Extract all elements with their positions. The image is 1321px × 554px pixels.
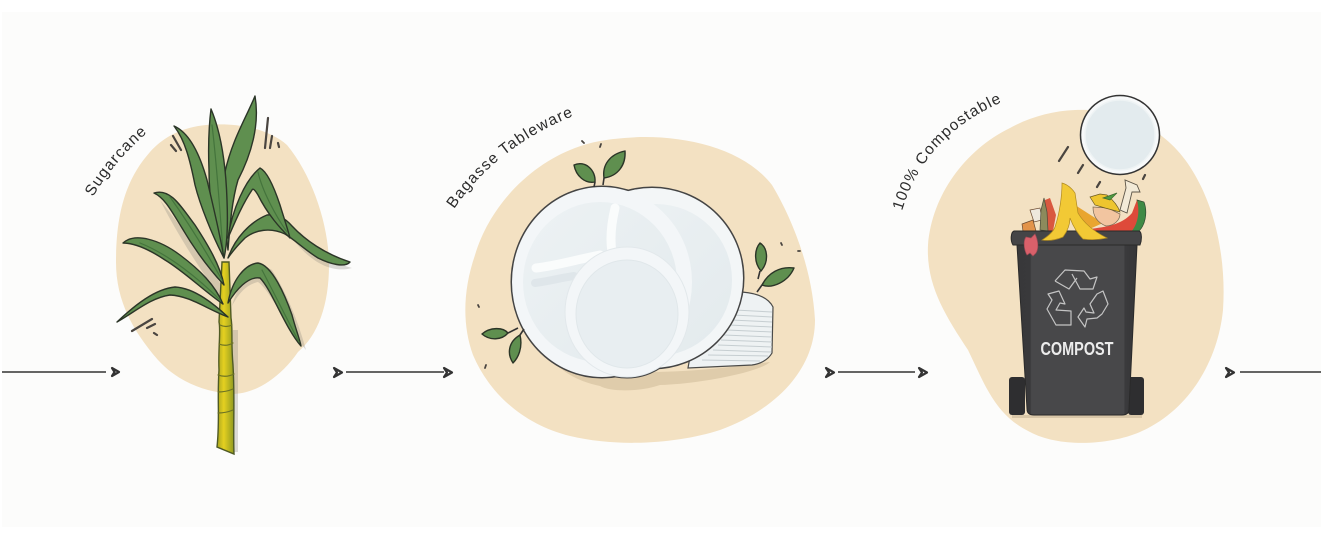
divided plate (512, 187, 692, 377)
plate shadow (552, 358, 770, 390)
small plate (565, 247, 689, 377)
leaf: bottom left (117, 287, 228, 322)
leaf: lower right (228, 263, 301, 346)
arrow: tableware to compost (826, 368, 927, 377)
bin body (1017, 245, 1137, 415)
flower (1024, 234, 1038, 256)
motion dashes (1059, 147, 1145, 187)
food scraps (1022, 180, 1146, 232)
motion dashes (132, 118, 279, 335)
falling plate (1080, 96, 1160, 174)
label: 100% Compostable: 100% Compostable (893, 96, 1000, 210)
bin text: COMPOST (1040, 338, 1114, 359)
leaf: centre (209, 109, 227, 258)
leaves: right sprig (756, 243, 794, 292)
leaves: left sprig (482, 328, 524, 363)
leaf shadows (160, 200, 352, 452)
blob: tableware backdrop (465, 137, 815, 443)
specks (478, 141, 800, 368)
blob: sugarcane backdrop (116, 124, 329, 394)
arrow: into sugarcane (2, 368, 119, 376)
label: Bagasse Tableware: Bagasse Tableware (446, 110, 572, 208)
leaf: left lower (123, 238, 223, 304)
illustration: sugarcane plant (117, 96, 352, 454)
arrow: out of compost (1226, 368, 1321, 377)
arrow: sugarcane to tableware (334, 368, 452, 377)
plate stack (688, 292, 773, 368)
label: Sugarcane: Sugarcane (86, 128, 146, 196)
back plate (561, 188, 743, 368)
leaf: long right (228, 215, 350, 265)
leaf: upper left (174, 126, 224, 258)
recycling symbol (1047, 270, 1108, 327)
bin shadow (1012, 415, 1142, 418)
bin lid (1011, 231, 1141, 245)
leaf: top centre-right (224, 96, 256, 250)
leaves: top sprig (574, 151, 625, 187)
stem (217, 262, 234, 454)
blob: compost backdrop (928, 110, 1224, 443)
bin wheels (1009, 377, 1144, 415)
leaf: left middle (154, 192, 224, 285)
illustration: compost bin (1009, 96, 1160, 418)
plates outline (512, 187, 743, 377)
leaf: folded right (228, 168, 290, 238)
illustration: bagasse plates (478, 141, 800, 390)
banana peel (1042, 183, 1107, 240)
